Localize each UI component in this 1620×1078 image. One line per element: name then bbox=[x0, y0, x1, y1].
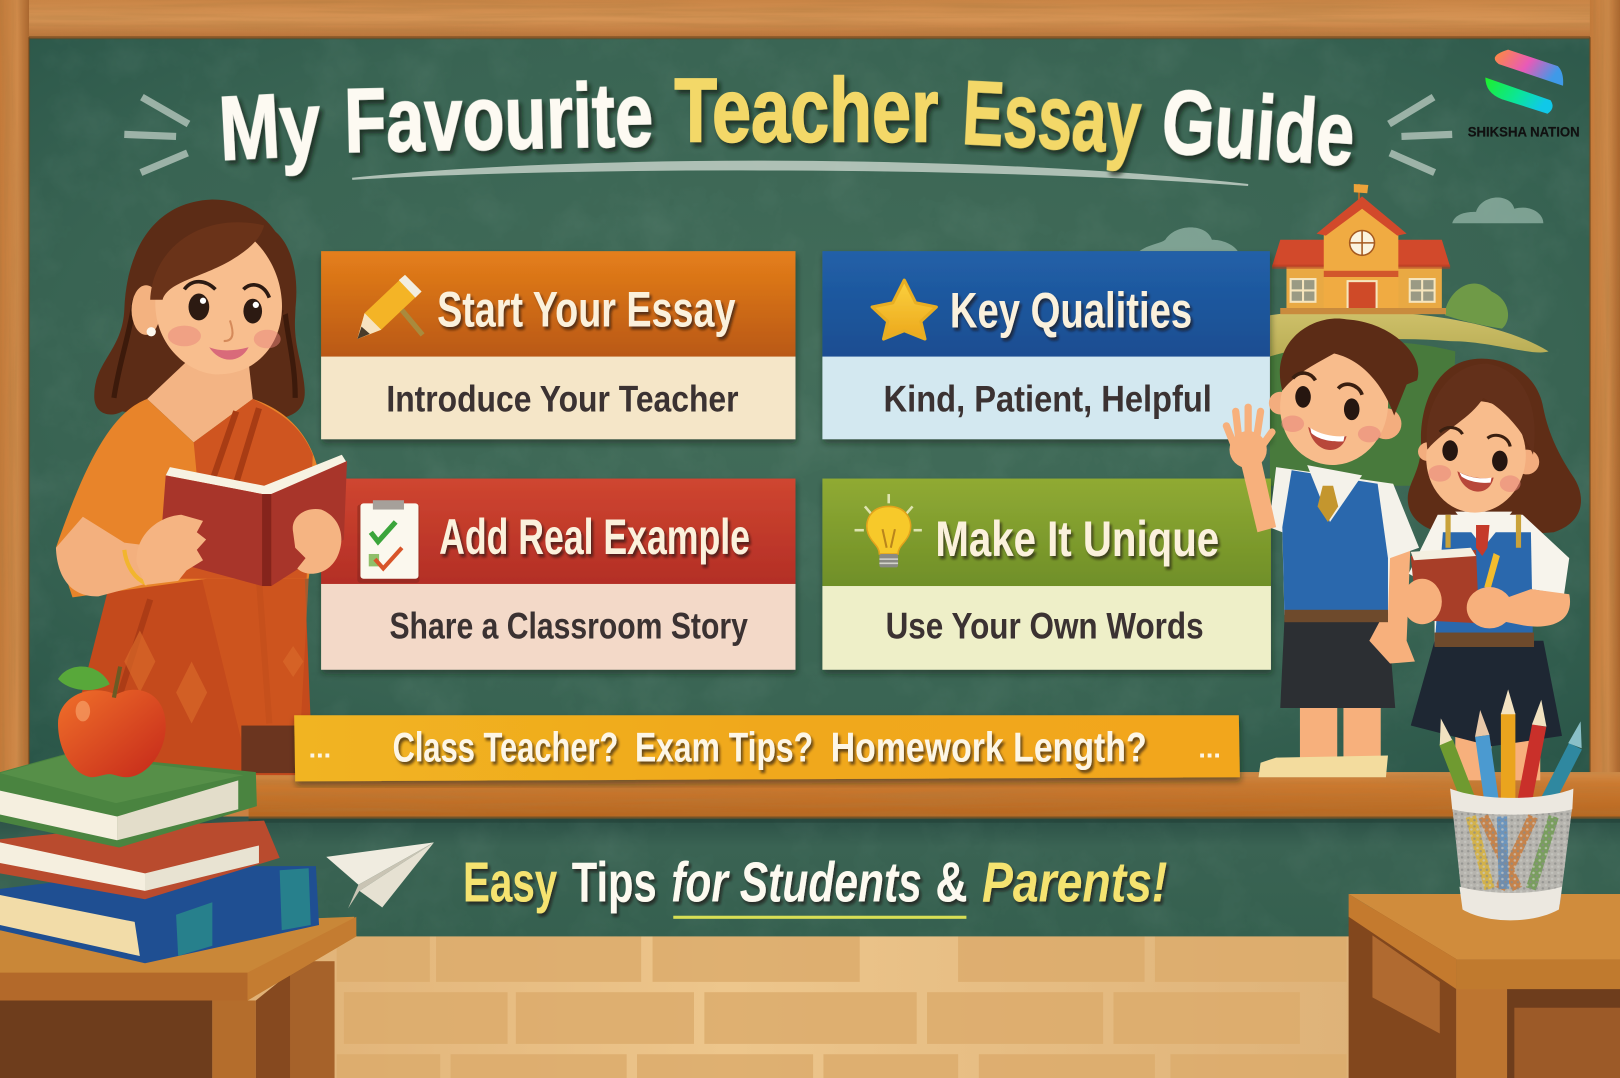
icon: clipboard checklist bbox=[357, 500, 420, 583]
arms and hands bbox=[1497, 589, 1570, 627]
hair back bbox=[94, 199, 305, 419]
panel: Start Your Essay: Introduce Your Teacher bbox=[386, 377, 739, 419]
panel: Key Qualities: Kind, Patient, Helpful bbox=[884, 377, 1212, 419]
head bbox=[132, 285, 161, 335]
icon: paper airplane bbox=[326, 842, 434, 908]
title: Favourite bbox=[343, 65, 654, 172]
tagline: Parents! bbox=[982, 850, 1167, 914]
title: My bbox=[216, 74, 323, 180]
open book bbox=[160, 455, 347, 586]
title: Essay bbox=[960, 63, 1144, 173]
tagline: & bbox=[935, 850, 967, 914]
tagline bbox=[463, 850, 1167, 919]
left desk bbox=[0, 917, 356, 1078]
pencils bbox=[1446, 713, 1575, 801]
panel: Make It Unique: Use Your Own Words bbox=[886, 605, 1204, 647]
tagline: for Students bbox=[671, 850, 922, 914]
saree motifs bbox=[124, 630, 303, 723]
banner: questions: Class Teacher? bbox=[393, 725, 618, 771]
cup rim bbox=[1450, 789, 1573, 815]
blouse bbox=[56, 399, 321, 597]
banner: questions bbox=[294, 715, 1240, 781]
cup base bbox=[1459, 887, 1562, 920]
cup mesh bbox=[1452, 806, 1572, 904]
pencil holder bbox=[1440, 689, 1582, 920]
eyes and brows bbox=[189, 294, 209, 320]
icon: light bulb bbox=[855, 494, 922, 567]
wooden frame bbox=[0, 0, 1620, 781]
hair back bbox=[1408, 359, 1581, 537]
panel: Start Your Essay bbox=[321, 251, 795, 439]
right desk bbox=[1349, 894, 1620, 1078]
banner: questions: Homework Length? bbox=[831, 725, 1147, 771]
chalk underline bbox=[352, 162, 1248, 185]
fringe bbox=[1427, 364, 1535, 455]
shorts bbox=[1280, 620, 1395, 708]
book and pencil bbox=[1411, 550, 1479, 623]
uniform top bbox=[1409, 515, 1569, 646]
teacher illustration bbox=[56, 199, 347, 775]
stack of books bbox=[0, 753, 319, 963]
legs bbox=[1300, 703, 1337, 763]
hill bbox=[1270, 311, 1549, 357]
head bbox=[1370, 408, 1401, 439]
school scene bbox=[1270, 184, 1549, 486]
tagline: Easy bbox=[463, 850, 558, 914]
banner: questions: ... bbox=[309, 734, 331, 764]
girl illustration bbox=[1402, 359, 1581, 780]
icon: star bbox=[872, 280, 936, 339]
panel: Key Qualities: Key Qualities bbox=[950, 283, 1192, 339]
school building bbox=[1272, 184, 1450, 314]
hands bbox=[137, 515, 206, 585]
chalk burst left bbox=[124, 97, 189, 173]
arm bbox=[56, 517, 166, 596]
panel: Add Real Example bbox=[321, 479, 795, 670]
brick wall bbox=[0, 925, 1620, 1078]
icon: pencil bbox=[357, 275, 423, 339]
logo: Shiksha Nation bbox=[1468, 50, 1580, 139]
boy illustration bbox=[1226, 319, 1419, 777]
chalk ledge bbox=[249, 772, 1620, 823]
panel: Start Your Essay: Start Your Essay bbox=[437, 282, 736, 338]
face bbox=[1295, 386, 1311, 408]
panel: Add Real Example: Add Real Example bbox=[439, 509, 750, 565]
head bbox=[1514, 450, 1539, 474]
panel: Make It Unique: Make It Unique bbox=[935, 511, 1219, 567]
skirt bbox=[1411, 641, 1562, 746]
title: Guide bbox=[1159, 71, 1358, 185]
saree lower bbox=[62, 572, 311, 775]
saree pallu bbox=[166, 399, 313, 579]
banner: questions: Exam Tips? bbox=[635, 725, 813, 771]
waving arm bbox=[1239, 453, 1276, 532]
hair front bbox=[150, 222, 264, 300]
legs bbox=[1455, 734, 1492, 780]
tagline: Tips bbox=[572, 850, 657, 914]
shoes bbox=[1259, 756, 1388, 777]
title: Teacher bbox=[674, 61, 938, 162]
blue book bbox=[0, 866, 319, 963]
banner: questions: ... bbox=[1198, 734, 1221, 764]
panel: Key Qualities bbox=[822, 251, 1270, 439]
neck and chest bbox=[147, 362, 253, 442]
face bbox=[1442, 440, 1458, 461]
right arm bbox=[1369, 527, 1415, 664]
panel: Add Real Example: Share a Classroom Story bbox=[389, 605, 748, 647]
panel: Make It Unique bbox=[822, 479, 1271, 670]
logo: Shiksha Nation: SHIKSHA NATION bbox=[1468, 124, 1580, 139]
green book bbox=[0, 753, 257, 848]
icon: clouds bbox=[1139, 197, 1543, 251]
chalk burst right bbox=[1389, 97, 1452, 173]
title bbox=[216, 61, 1358, 185]
vest and shirt bbox=[1269, 467, 1419, 615]
hair bbox=[1280, 319, 1418, 415]
red book bbox=[0, 821, 280, 899]
icon: apple bbox=[58, 666, 166, 777]
